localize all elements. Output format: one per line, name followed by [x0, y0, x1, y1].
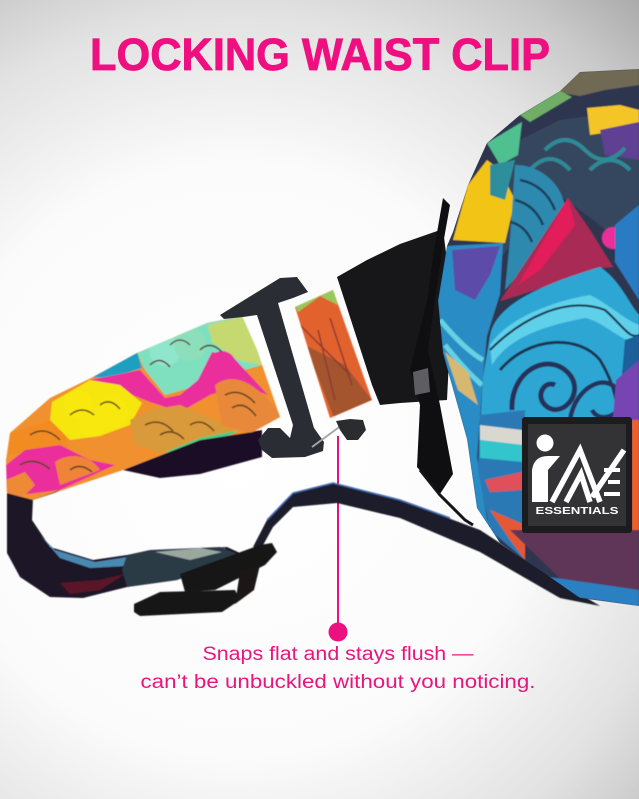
big blue wave — [480, 267, 639, 430]
thin strap to bag — [253, 483, 600, 606]
icon: brand logo — [532, 434, 624, 502]
pocket left side — [438, 243, 503, 543]
red printed strap past buckle — [294, 290, 373, 418]
lower looped strap — [7, 490, 240, 598]
callout caption — [140, 644, 536, 693]
black webbing panel — [337, 229, 452, 405]
callout dot — [328, 622, 348, 642]
product: waist strap — [0, 285, 600, 616]
patch label: ESSENTIALS — [536, 505, 618, 517]
top dark panel pattern — [500, 110, 639, 260]
callout caption: Snaps flat and stays flush — — [202, 644, 474, 665]
icon: black locking buckle — [220, 277, 366, 458]
left yellow and green fold — [453, 160, 515, 243]
dark underside of strap — [123, 430, 262, 478]
strap adjuster slider — [122, 547, 240, 587]
colourful printed strap — [5, 317, 281, 501]
callout caption: can’t be unbuckled without you noticing. — [140, 672, 536, 693]
lower bag bands — [478, 410, 525, 560]
title: LOCKING WAIST CLIP — [90, 29, 550, 80]
logo patch — [522, 417, 632, 533]
callout leader line — [337, 436, 339, 632]
product: colourful hip bag — [430, 60, 639, 610]
red wedge — [500, 198, 613, 301]
spiral swirls — [512, 364, 575, 410]
clip and cord on webbing — [410, 198, 473, 525]
blue wave near seam — [505, 165, 565, 290]
yellow cloud — [50, 380, 142, 440]
